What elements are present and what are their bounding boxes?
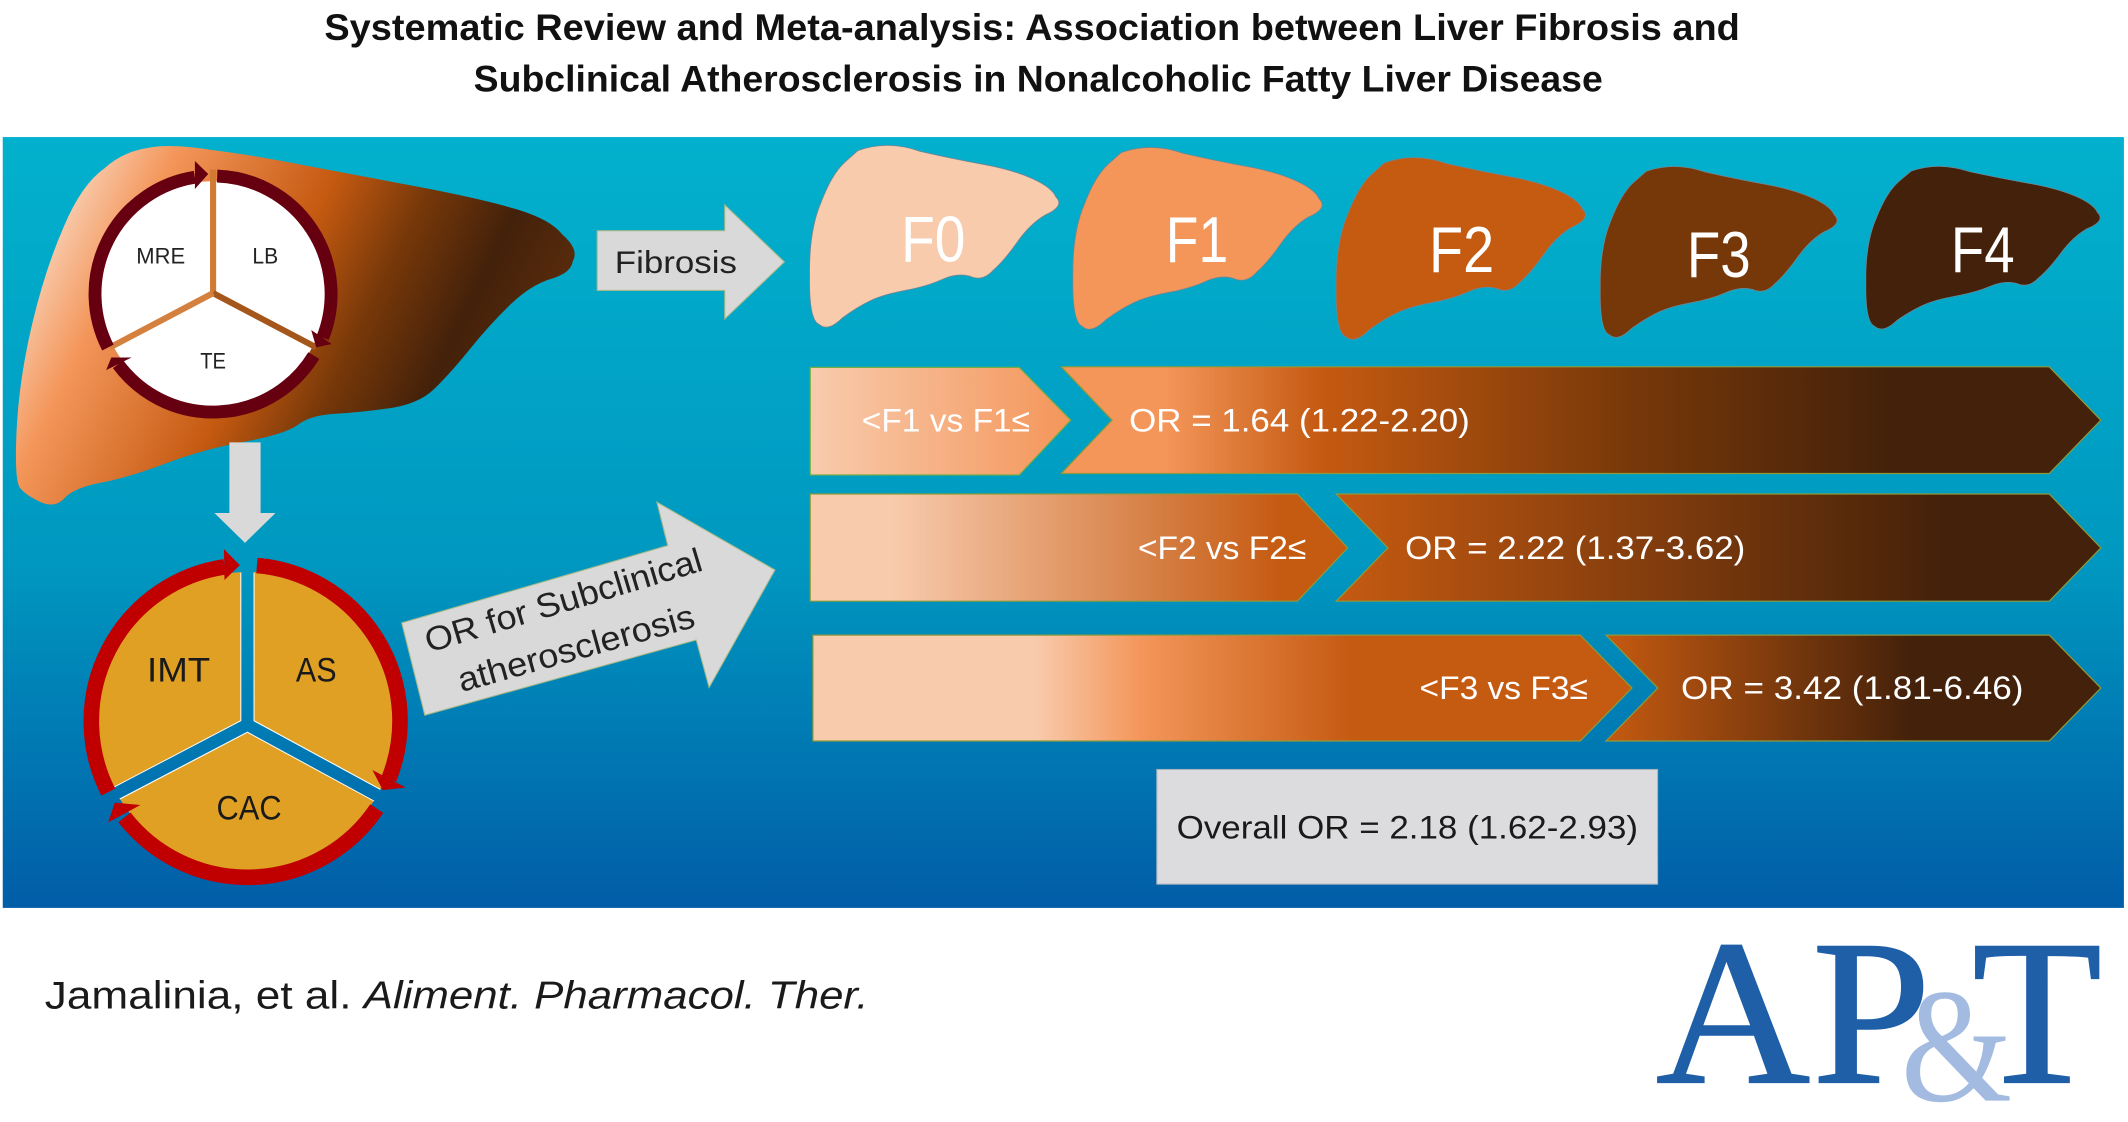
- arrow: fibrosis: Fibrosis: [615, 244, 737, 280]
- chevron row: F1 threshold: <F1 vs F1≤: [862, 403, 1030, 439]
- liver F0: F0: [901, 203, 965, 276]
- large liver: [16, 146, 575, 505]
- method labels: LB: [252, 243, 278, 268]
- chevron row: F1 threshold: OR = 1.64 (1.22-2.20): [1129, 403, 1470, 439]
- arrow: fibrosis: [597, 205, 784, 319]
- arrow: OR for subclinical atherosclerosis: atherosclerosis: [453, 598, 699, 700]
- callout: overall OR: [1157, 769, 1658, 884]
- arrow: OR for subclinical atherosclerosis: [402, 502, 775, 715]
- chevron row: F2 threshold: OR = 2.22 (1.37-3.62): [1405, 530, 1745, 566]
- liver F3: [1600, 166, 1837, 337]
- citation: Aliment. Pharmacol. Ther.: [362, 973, 869, 1017]
- title: Subclinical Atherosclerosis in Nonalcoholic Fatty Liver Disease: [474, 58, 1603, 100]
- liver F1: F1: [1166, 203, 1228, 276]
- chevron row: F2 threshold: [810, 494, 2101, 601]
- wheel labels: IMT: [147, 651, 210, 689]
- wheel labels: CAC: [216, 790, 282, 828]
- panel: gradient background: [3, 137, 2124, 908]
- arrow: down: [214, 442, 276, 543]
- liver F3: F3: [1687, 218, 1751, 291]
- citation: [45, 973, 869, 1017]
- wheel labels: AS: [296, 651, 337, 689]
- logo: AP&T: T: [1972, 897, 2102, 1122]
- logo: AP&T: P: [1812, 897, 1931, 1122]
- citation: Jamalinia, et al.: [45, 973, 352, 1017]
- arrow: OR for subclinical atherosclerosis: OR for Subclinical: [420, 541, 707, 660]
- chevron row: F3 threshold: OR = 3.42 (1.81-6.46): [1681, 670, 2023, 706]
- callout: overall OR: Overall OR = 2.18 (1.62-2.93): [1177, 810, 1638, 846]
- panel: liver with diagnostic methods: [16, 146, 575, 505]
- liver F4: [1866, 166, 2100, 329]
- liver F2: F2: [1429, 213, 1494, 286]
- chevron row: F1 threshold: [810, 367, 2101, 475]
- panel: atherosclerosis wheel: [91, 549, 406, 877]
- chevron row: F3 threshold: <F3 vs F3≤: [1420, 670, 1588, 706]
- wheel labels: [147, 651, 337, 828]
- method labels: TE: [200, 348, 226, 373]
- method labels: [136, 243, 278, 373]
- logo: AP&T: [1656, 897, 2102, 1122]
- liver F1: [1073, 147, 1322, 329]
- title: Systematic Review and Meta-analysis: Association between Liver Fibrosis and: [324, 6, 1740, 48]
- liver F4: F4: [1951, 213, 2015, 286]
- chevron row: F2 threshold: <F2 vs F2≤: [1138, 530, 1306, 566]
- chevron row: F3 threshold: [813, 635, 2101, 741]
- logo: AP&T: A: [1656, 897, 1810, 1122]
- methods wheel: [95, 161, 332, 412]
- liver F0: [810, 145, 1059, 327]
- liver F2: [1336, 158, 1585, 339]
- method labels: MRE: [136, 243, 185, 268]
- title: [324, 6, 1740, 100]
